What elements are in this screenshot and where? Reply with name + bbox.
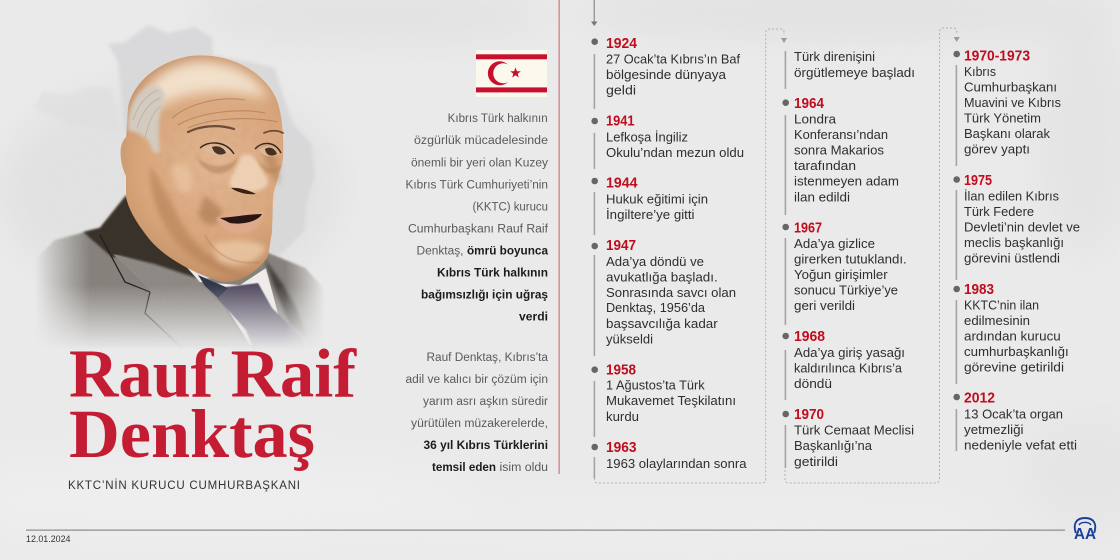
event 1963 continued: Türk direnişini [794,49,875,64]
eyebrows [188,126,283,133]
right jacket dark lapel [264,260,304,332]
intro text block: Kıbrıs Türk halkının [437,268,548,280]
event 1975: meclis başkanlığı [964,235,1064,250]
event 2012 [953,390,1077,452]
event 1958: Mukavemet Teşkilatını [606,393,736,408]
event 1968: döndü [794,376,832,391]
event 1967: Yoğun girişimler [794,267,888,282]
event 1970-1973: 1970-1973 [964,48,1030,64]
event 1944: Hukuk eğitimi için [606,192,708,206]
event 1963 continued [785,49,915,89]
ear [121,133,150,195]
event 1964: ilan edildi [794,190,850,204]
timeline column 2 [782,49,915,469]
event 1941: Okulu’ndan mezun oldu [606,145,744,160]
event 1970-1973: Cumhurbaşkanı [964,80,1057,94]
negotiation text block: yarım asrı aşkın süredir [423,396,548,408]
portrait: Rauf Raif Denktaş [39,55,322,348]
event 1944: İngiltere’ye gitti [606,207,695,222]
event 1970-1973: Türk Yönetim [964,110,1041,126]
event 1924 [591,36,740,109]
intro text block: Cumhurbaşkanı Rauf Raif [408,224,549,236]
chin crease [205,235,260,263]
event 1983: görevine getirildi [964,360,1064,374]
eye bags [196,155,282,173]
date: 12.01.2024 [26,534,70,544]
event 1947: yükseldi [606,332,653,346]
event 1964: Londra [794,112,837,126]
logo: AA [1074,518,1096,543]
event 1947: başsavcılığa kadar [606,316,718,331]
event 1967: geri verildi [794,298,855,313]
event 1947: Denktaş, 1956’da [606,300,706,315]
event 1970: Türk Cemaat Meclisi [794,422,914,438]
tie [217,282,298,345]
event 1947: Ada’ya döndü ve [606,254,704,269]
red divider [559,0,560,474]
event 1970 [782,407,914,469]
event 1941 [591,114,744,169]
event 1967: 1967 [794,220,822,236]
flag: Northern Cyprus [476,50,547,97]
intro text block: Kıbrıs Türk halkının [448,113,548,125]
cheek shadow and jowl [150,145,279,276]
suit jacket [39,194,322,348]
nose [230,154,268,194]
event 1958: kurdu [606,409,639,424]
negotiation text block: temsil eden [432,462,496,474]
negotiation text block: 36 yıl Kıbrıs Türklerini [424,440,548,452]
event 1970-1973: görev yaptı [964,142,1030,156]
event 1968: Ada’ya giriş yasağı [794,345,905,360]
negotiation text block: Rauf Denktaş, Kıbrıs’ta [426,352,549,364]
event 1947: 1947 [606,238,636,254]
event 1964: tarafından [794,158,856,173]
event 1967: girerken tutuklandı. [794,252,907,266]
event 1975: görevini üstlendi [964,250,1060,266]
negotiation text block [406,352,549,474]
intro text block: Kıbrıs Türk Cumhuriyeti’nin [406,180,548,192]
bald dome highlight [142,61,270,107]
intro text block [406,113,549,324]
event 1947 [591,238,736,356]
intro text block: ömrü boyunca [467,246,549,258]
event 1941: Lefkoşa İngiliz [606,130,688,144]
event 1924: 1924 [606,36,637,52]
event 1947: Sonrasında savcı olan [606,285,736,300]
event 1975: Devleti’nin devlet ve [964,220,1080,234]
negotiation text block: yürütülen müzakerelerde, [411,418,548,430]
lapel [113,254,208,293]
event 1963: 1963 olaylarından sonra [606,456,747,471]
intro text block: bağımsızlığı için uğraş [421,290,548,302]
grey hair [128,86,165,154]
arrow: timeline start [591,0,598,26]
intro text block: verdi [519,312,548,324]
mouth [216,210,264,233]
neck and head [126,55,283,282]
timeline column 1 [591,36,747,478]
event 1970: 1970 [794,407,824,423]
map silhouette behind portrait [34,25,315,255]
event 1924: 27 Ocak’ta Kıbrıs’ın Baf [606,51,740,66]
footer rule [26,530,1065,531]
collar dark [83,196,200,279]
event 1970: Başkanlığı’na [794,438,873,453]
subtitle: KKTC’NİN KURUCU CUMHURBAŞKANI [68,479,300,492]
event 1968: kaldırılınca Kıbrıs’a [794,360,903,376]
event 1970: getirildi [794,454,838,469]
event 1983: 1983 [964,282,994,298]
event 1983: KKTC’nin ilan [964,298,1039,312]
event 1968: 1968 [794,329,825,345]
event 1944: 1944 [606,176,638,192]
event 2012: 2012 [964,390,995,406]
event 1964: Konferansı’ndan [794,127,888,142]
event 1983: ardından kurucu [964,328,1061,344]
event 1963: 1963 [606,440,636,456]
right eye [255,143,281,156]
event 1983: edilmesinin [964,313,1030,328]
event 1967: Ada’ya gizlice [794,236,875,251]
event 1958: 1958 [606,362,636,378]
event 1958: 1 Ağustos’ta Türk [606,378,705,392]
event 2012: nedeniyle vefat etti [964,438,1077,452]
title [69,336,357,472]
event 1975: Türk Federe [964,204,1034,219]
negotiation text block: adil ve kalıcı bir çözüm için [406,374,548,386]
event 1924: geldi [606,82,636,98]
intro text block: (KKTC) kurucu [472,202,548,214]
timeline column 3 [953,48,1080,452]
event 2012: yetmezliği [964,422,1024,437]
event 1970-1973: Başkanı olarak [964,126,1050,141]
event 1964: istenmeyen adam [794,174,899,189]
event 1958 [591,362,736,437]
event 1975 [953,173,1080,280]
title: Denktaş [69,396,315,472]
left eye [200,143,234,155]
event 1947: avukatlığa başladı. [606,270,718,284]
event 1975: 1975 [964,173,992,189]
event 1963 [591,440,747,478]
event 1924: bölgesinde dünyaya [606,67,727,82]
negotiation text block: isim oldu [500,462,548,474]
intro text block: Denktaş, [416,246,464,258]
arrow: dashed connector column 1 to 2 [594,29,787,483]
intro text block: önemli bir yeri olan Kuzey [411,158,548,170]
shirt [187,268,278,345]
event 1964: 1964 [794,96,824,112]
event 1975: İlan edilen Kıbrıs [964,188,1059,204]
event 1967 [782,220,907,325]
event 1964 [782,96,899,215]
event 1967: sonucu Türkiye’ye [794,282,898,298]
forehead wrinkles [172,99,278,128]
arrow: dashed connector column 2 to 3 [785,28,960,483]
event 1970-1973: Muavini ve Kıbrıs [964,95,1061,110]
event 2012: 13 Ocak’ta organ [964,406,1063,422]
title: Rauf Raif [69,336,357,412]
event 1983: cumhurbaşkanlığı [964,344,1069,359]
event 1963 continued: örgütlemeye başladı [794,65,915,80]
intro text block: özgürlük mücadelesinde [414,135,548,147]
event 1970-1973 [953,48,1061,166]
event 1970-1973: Kıbrıs [964,64,996,79]
event 1944 [591,176,708,235]
event 1941: 1941 [606,114,634,130]
event 1964: sonra Makarios [794,142,884,158]
event 1968 [782,329,905,400]
logo: AA: AA [1074,526,1096,543]
event 1983 [953,282,1069,384]
